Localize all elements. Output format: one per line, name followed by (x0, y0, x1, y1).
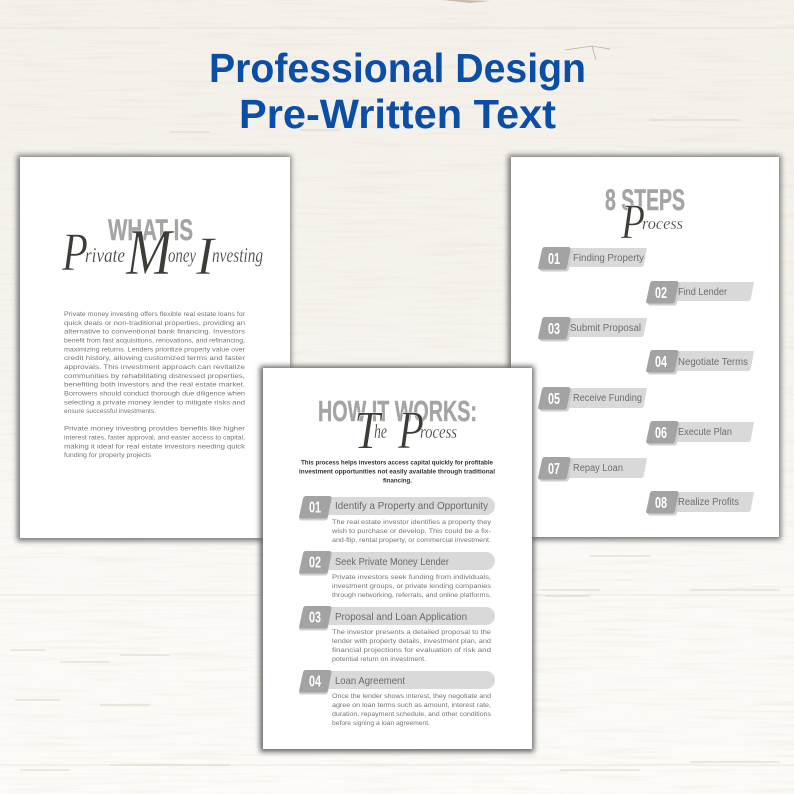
step 04: 04 (655, 354, 667, 371)
body paragraph 1: benefit from fast acquisitions, renovations, and refinancing, (64, 338, 245, 344)
item 01: 01 (309, 500, 321, 516)
title: Professional Design (209, 45, 586, 91)
body paragraph 2: interest rates, faster approval, and easier access to capital, (64, 434, 245, 442)
step 04: Negotiate Terms (678, 357, 748, 368)
panel: what is private money investing (17, 155, 291, 541)
item 03: Proposal and Loan Application (335, 611, 467, 623)
step 03: 03 (548, 321, 560, 338)
item 04: before signing a loan agreement. (332, 720, 430, 727)
step 01: Finding Property (573, 253, 644, 264)
item 02: Private investors seek funding from individuals, (332, 574, 491, 581)
body paragraph 2: Private money investing provides benefits like higher (64, 426, 246, 433)
item 03: 03 (309, 610, 321, 626)
heading script: private money investing: M (125, 216, 175, 289)
body paragraph 1 (64, 311, 246, 415)
body paragraph 1: ensure successful investments. (64, 408, 156, 415)
step 07: Repay Loan (573, 463, 623, 474)
heading: how it works: HOW IT WORKS: (318, 396, 477, 428)
heading script: private money investing: nvesting (212, 243, 263, 267)
item 02: 02 (309, 554, 321, 572)
body paragraph 2: making it ideal for real estate investors needing quick (64, 443, 246, 450)
step 07 (538, 457, 647, 482)
heading script: private money investing: oney (168, 243, 196, 267)
item 03: lender with property details, investment plan, and (332, 638, 491, 645)
body paragraph 1: quick deals or non-traditional properties, providing an (64, 320, 246, 327)
item 01 (299, 496, 495, 544)
item 01: Identify a Property and Opportunity (335, 500, 489, 512)
title (209, 45, 586, 137)
heading script: process: rocess (642, 214, 683, 233)
body paragraph 1: maximizing returns. Lenders prioritize property value over (64, 346, 246, 353)
item 04 (299, 670, 495, 727)
item 04: Once the lender shows interest, they negotiate and (332, 693, 491, 700)
body paragraph 1: approvals. This investment approach can revitalize (64, 364, 246, 371)
item 02: through networking, referrals, and online platforms. (332, 592, 491, 599)
body paragraph 1: selecting a private money lender to mitigate risks and (64, 399, 246, 406)
step 02 (646, 281, 754, 306)
item 02: Seek Private Money Lender (335, 556, 449, 568)
intro text: financing. (383, 478, 412, 484)
step 02: Find Lender (678, 287, 728, 298)
title: Pre-Written Text (239, 91, 556, 137)
step 08: Realize Profits (678, 497, 739, 508)
heading: what is: WHAT IS (108, 214, 193, 247)
heading script: the process: T (354, 400, 383, 460)
step 05 (538, 387, 647, 412)
heading script: private money investing: rivate (85, 243, 125, 267)
step 02: 02 (655, 285, 667, 302)
step 06 (646, 421, 754, 446)
item 01: wish to purchase or develop. This could be a fix- (331, 528, 491, 535)
step 05: 05 (548, 391, 560, 408)
item 04: duration, repayment schedule, and other conditions (332, 711, 491, 718)
body paragraph 1: alternative to conventional bank financing. Investors (64, 329, 245, 336)
item 04: 04 (309, 674, 321, 690)
step 03: Submit Proposal (570, 323, 641, 334)
body paragraph 2: funding for property projects (64, 452, 151, 459)
item 02: investment groups, or private lending companies (332, 583, 491, 590)
body paragraph 1: Private money investing offers flexible real estate loans for (64, 311, 246, 318)
step 06: 06 (655, 425, 667, 442)
item 03: potential return on investment. (332, 656, 426, 663)
body paragraph 1: Borrowers should conduct thorough due diligence when (64, 390, 246, 398)
heading script: the process: P (397, 400, 424, 460)
step 03 (538, 317, 647, 342)
heading script: private money investing: P (61, 222, 88, 282)
step 08 (646, 491, 754, 516)
intro text: This process helps investors access capital quickly for profitable (301, 460, 493, 466)
item 04: Loan Agreement (335, 675, 405, 687)
item 01: The real estate investor identifies a property they (332, 519, 492, 526)
body paragraph 2 (64, 426, 246, 459)
panel: 8 steps process (508, 155, 781, 540)
step 01: 01 (548, 251, 560, 268)
heading script: process (620, 193, 683, 249)
step 06: Execute Plan (678, 427, 732, 438)
step 04 (646, 350, 754, 374)
panel: how it works the process (260, 366, 534, 752)
body paragraph 1: communities by rehabilitating distressed properties, (64, 373, 245, 380)
intro text: investment opportunities not easily available through traditional (299, 468, 495, 476)
heading script: process: P (620, 193, 645, 249)
heading script: private money investing (61, 216, 263, 289)
step 08: 08 (655, 495, 667, 512)
item 03: The investor presents a detailed proposal to the (332, 629, 492, 636)
heading script: the process: rocess (420, 422, 457, 443)
step 07: 07 (548, 461, 560, 478)
heading script: the process: he (374, 421, 387, 443)
heading script: the process (354, 400, 457, 460)
item 03 (299, 606, 495, 663)
body paragraph 1: benefiting both investors and the real estate market. (64, 382, 245, 389)
item 03: financial projections for evaluation of risk and (332, 647, 492, 654)
item 02 (299, 551, 495, 599)
step 05: Receive Funding (573, 393, 642, 404)
heading: 8 steps: 8 STEPS (605, 184, 685, 217)
item 04: agree on loan terms such as amount, interest rate, (332, 702, 491, 709)
body paragraph 1: credit history, allowing customized terms and faster (64, 355, 246, 362)
heading script: private money investing: I (195, 226, 217, 286)
intro text (299, 460, 495, 484)
step 01 (538, 247, 647, 272)
item 01: and-flip, rental property, or commercial investment. (332, 537, 491, 544)
